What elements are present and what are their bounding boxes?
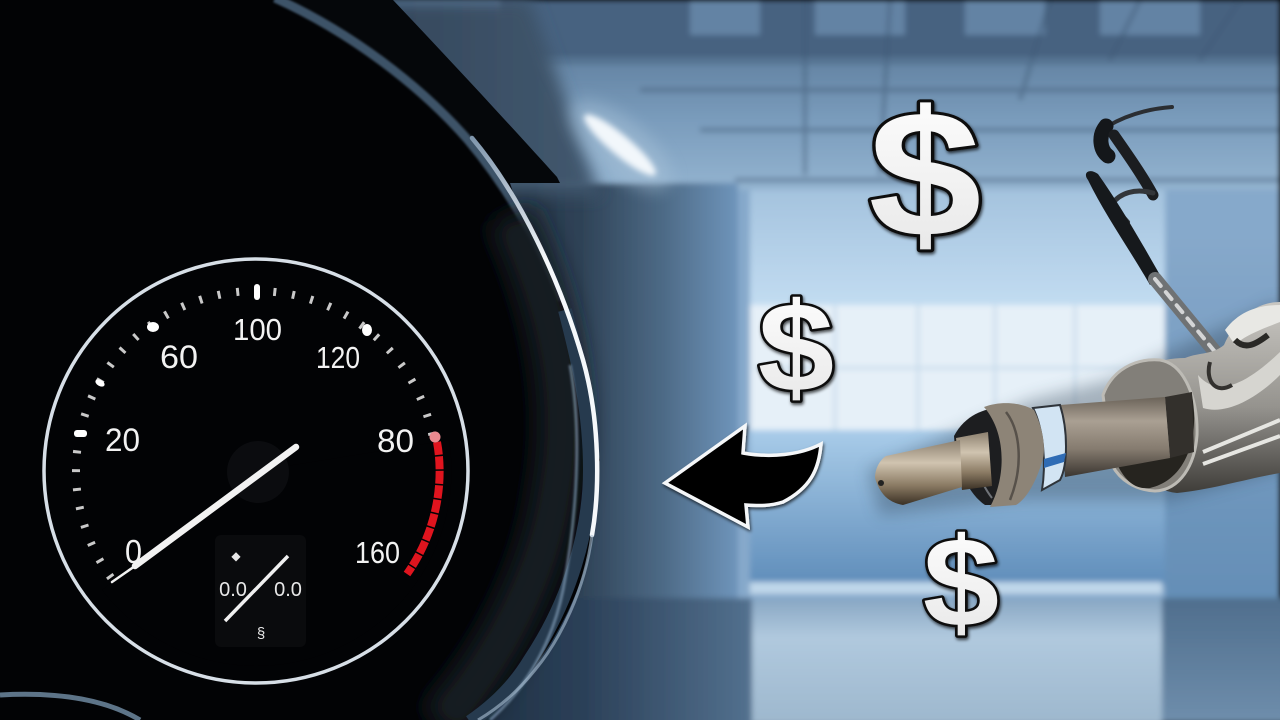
speed labels: 60 (160, 339, 198, 375)
sensor body rear (1110, 302, 1280, 493)
flange rim (1103, 360, 1197, 491)
sensor shaft (1060, 397, 1170, 477)
red zone (407, 442, 440, 574)
sensor tip (875, 440, 962, 505)
dollar sign small: $ (923, 512, 999, 654)
ceiling light glare (556, 86, 684, 206)
hub (227, 441, 289, 503)
gauge dial (44, 259, 468, 683)
dashboard black surround (0, 0, 600, 720)
speed labels: 100 (233, 312, 282, 347)
dollar sign medium: $ (758, 277, 834, 419)
speed labels: 160 (355, 535, 400, 570)
speed labels: 120 (316, 340, 360, 375)
dollar sign large: $ (868, 73, 982, 274)
hex nut (984, 403, 1044, 507)
major dots (74, 284, 372, 437)
gauge dial: 0.0 (274, 579, 302, 601)
black washer (954, 408, 1015, 505)
speed labels: 20 (105, 422, 140, 458)
speed labels (105, 312, 414, 570)
blue band (1033, 405, 1066, 490)
gauge dial: 0.0 (219, 579, 247, 601)
speed labels: 0 (125, 533, 142, 570)
tick marks (76, 291, 436, 651)
sub display needle (225, 556, 288, 621)
arrow pointing to gauge (665, 426, 821, 527)
sensor shadow (868, 300, 1280, 515)
sensor wire (1086, 107, 1225, 364)
gauge dial: § (257, 625, 265, 642)
oxygen sensor (868, 107, 1280, 515)
dollar signs (758, 73, 999, 654)
gauge dial: ◆ (231, 549, 241, 563)
needle (112, 447, 296, 582)
speed labels: 80 (377, 423, 414, 459)
gauge bezel curved outer ring (0, 0, 599, 720)
collar (956, 432, 992, 490)
dashboard housing: slate panel (0, 0, 600, 400)
sub display (215, 535, 306, 647)
